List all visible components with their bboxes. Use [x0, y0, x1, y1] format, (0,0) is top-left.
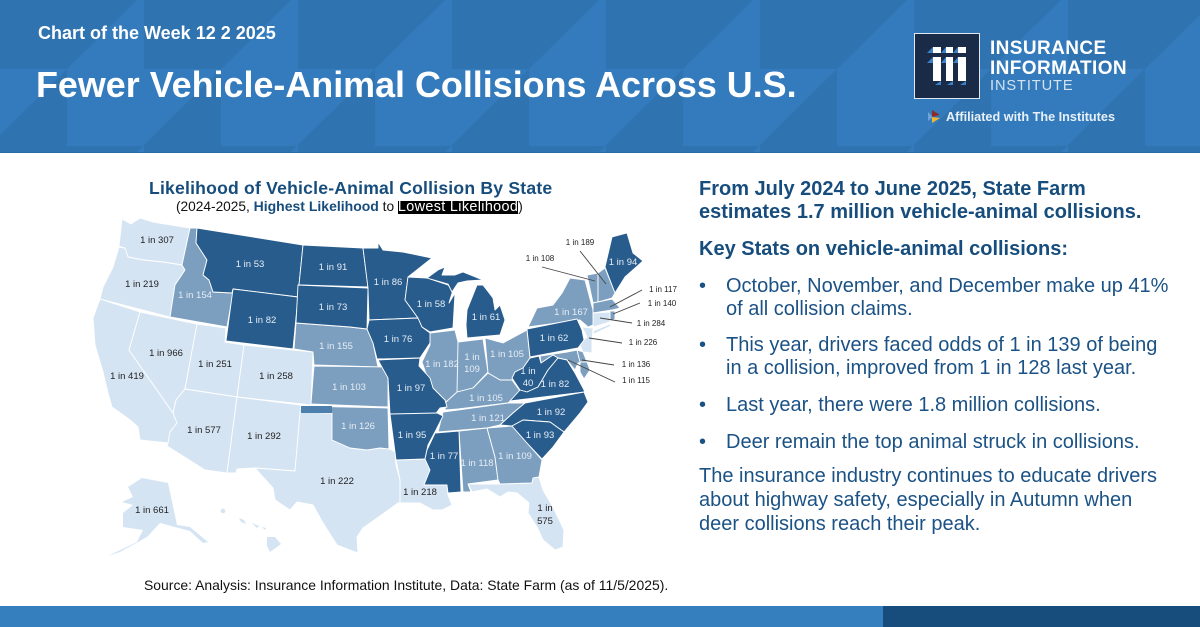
- state labels: dark and mid states: 1 in 82: [541, 379, 569, 390]
- state labels: dark and mid states: 1 in 167: [554, 307, 588, 318]
- state labels: light states: 1 in 136: [622, 360, 651, 369]
- state labels: light states: 1 in 219: [125, 279, 159, 290]
- state labels: light states: 1 in: [537, 503, 553, 514]
- logo: Insurance Information Institute: [914, 33, 1127, 124]
- text: Deer remain the top animal struck in collisions.: [726, 431, 1140, 453]
- state labels: light states: 1 in 258: [259, 371, 293, 382]
- state labels: dark and mid states: 1 in 94: [609, 257, 637, 268]
- map subtitle legend: (2024-2025, Highest Likelihood to ): [176, 198, 523, 214]
- state labels: light states: 1 in 140: [648, 299, 677, 308]
- map subtitle legend: Lowest Likelihood: [398, 199, 518, 215]
- state labels: light states: 1 in 108: [526, 254, 555, 263]
- bullet: last year: [699, 394, 1101, 416]
- logo wordmark: [990, 38, 1127, 79]
- map title: Likelihood of Vehicle-Animal Collision By State: [149, 178, 552, 198]
- source note: Source: Analysis: Insurance Information Institute, Data: State Farm (as of 11/5/2025).: [144, 577, 668, 593]
- text: of all collision claims.: [726, 298, 913, 320]
- state labels: dark and mid states: 1 in 182: [425, 359, 459, 370]
- state labels: dark and mid states: 1 in 155: [319, 341, 353, 352]
- Hawaii: [221, 509, 281, 552]
- bullet: odds: •: [699, 334, 706, 356]
- state labels: dark and mid states: 1 in 118: [460, 458, 494, 469]
- state labels: light states: 1 in 661: [135, 505, 169, 516]
- Alaska: [108, 478, 208, 556]
- lead statement: estimates 1.7 million vehicle-animal collisions.: [699, 201, 1141, 223]
- state labels: dark and mid states: 1 in 76: [384, 334, 412, 345]
- state labels: light states: 1 in 115: [622, 376, 650, 385]
- state labels: dark and mid states: 109: [464, 364, 480, 375]
- state labels: light states: 1 in 419: [110, 371, 144, 382]
- bullet: deer: •: [699, 431, 706, 453]
- chart of the week label: Chart of the Week 12 2 2025: [38, 23, 276, 43]
- state labels: dark and mid states: 1 in 109: [498, 451, 532, 462]
- state labels: light states: 1 in 222: [320, 476, 354, 487]
- state labels: dark and mid states: 1 in 82: [248, 315, 276, 326]
- state labels: dark and mid states: 1 in 105: [469, 393, 503, 404]
- state labels: dark and mid states: 1 in 53: [236, 259, 264, 270]
- state labels: dark and mid states: 1 in 77: [430, 451, 458, 462]
- logo institute line: INSTITUTE: [990, 78, 1074, 94]
- mid states: [170, 228, 620, 492]
- state labels: dark and mid states: 40: [523, 378, 533, 389]
- state labels: light states: 575: [537, 516, 553, 527]
- lead statement: From July 2024 to June 2025, State Farm: [699, 178, 1086, 200]
- closing paragraph: deer collisions reach their peak.: [699, 513, 980, 535]
- state labels: dark and mid states: 1 in 58: [417, 299, 445, 310]
- bullet: deer: [699, 431, 1140, 453]
- header banner: [0, 0, 1200, 153]
- text: This year, drivers faced odds of 1 in 139 of being: [726, 334, 1157, 356]
- OK panhandle tone: [301, 406, 332, 413]
- state labels: dark and mid states: 1 in 93: [526, 430, 554, 441]
- choropleth map of U.S. states: [94, 218, 677, 556]
- state labels: light states: 1 in 307: [140, 235, 174, 246]
- state labels: dark and mid states: 1 in 95: [398, 430, 426, 441]
- state labels: light states: 1 in 218: [403, 487, 437, 498]
- state labels: dark and mid states: 1 in 126: [341, 421, 375, 432]
- state labels: light states: 1 in 577: [187, 425, 221, 436]
- footer bar: [0, 606, 1200, 627]
- state labels: outside leader lines: [542, 251, 642, 382]
- state labels: light states: 1 in 189: [566, 238, 595, 247]
- bullet: odds: [699, 334, 1157, 379]
- affiliated text: Affiliated with The Institutes: [946, 109, 1115, 124]
- state labels: dark and mid states: [178, 257, 637, 469]
- closing paragraph: about highway safety, especially in Autumn when: [699, 489, 1132, 511]
- footer dark segment: [883, 606, 1200, 627]
- logo wordmark: INFORMATION: [990, 58, 1127, 79]
- bullet: October to December: [699, 275, 1168, 320]
- main title: Fewer Vehicle-Animal Collisions Across U.S.: [36, 65, 797, 105]
- closing paragraph: [699, 465, 1157, 535]
- state labels: dark and mid states: 1 in 62: [540, 333, 568, 344]
- state labels: light states: 1 in 251: [198, 359, 232, 370]
- lead statement: [699, 178, 1141, 223]
- dark states: [196, 228, 643, 493]
- state labels: light states: 1 in 117: [649, 285, 677, 294]
- bullet: October to December: •: [699, 275, 706, 297]
- logo wordmark: INSURANCE: [990, 38, 1107, 59]
- state labels: light states: [110, 235, 677, 527]
- state labels: light states: 1 in 292: [247, 431, 281, 442]
- text: Last year, there were 1.8 million collisions.: [726, 394, 1101, 416]
- state labels: dark and mid states: 1 in 97: [397, 383, 425, 394]
- affiliated icon: [928, 110, 940, 123]
- state labels: dark and mid states: 1 in: [464, 352, 480, 363]
- state labels: dark and mid states: 1 in 103: [332, 382, 366, 393]
- state labels: dark and mid states: 1 in: [520, 366, 536, 377]
- state labels: dark and mid states: 1 in 92: [537, 407, 565, 418]
- light states: [93, 218, 611, 553]
- key stats heading: Key Stats on vehicle-animal collisions:: [699, 238, 1068, 260]
- state labels: dark and mid states: 1 in 121: [471, 413, 505, 424]
- state labels: dark and mid states: 1 in 105: [490, 349, 524, 360]
- state labels: dark and mid states: 1 in 86: [374, 277, 402, 288]
- state labels: dark and mid states: 1 in 61: [472, 312, 500, 323]
- state labels: dark and mid states: 1 in 91: [319, 262, 347, 273]
- state labels: dark and mid states: 1 in 73: [319, 302, 347, 313]
- closing paragraph: The insurance industry continues to educate drivers: [699, 465, 1157, 487]
- state labels: dark and mid states: 1 in 154: [178, 290, 212, 301]
- bullet: last year: •: [699, 394, 706, 416]
- text: October, November, and December make up 41%: [726, 275, 1168, 297]
- state labels: light states: 1 in 966: [149, 348, 183, 359]
- text: in a collision, improved from 1 in 128 last year.: [726, 357, 1136, 379]
- icon: III mark: [914, 33, 980, 99]
- state labels: light states: 1 in 226: [629, 338, 658, 347]
- state labels: light states: 1 in 284: [637, 319, 666, 328]
